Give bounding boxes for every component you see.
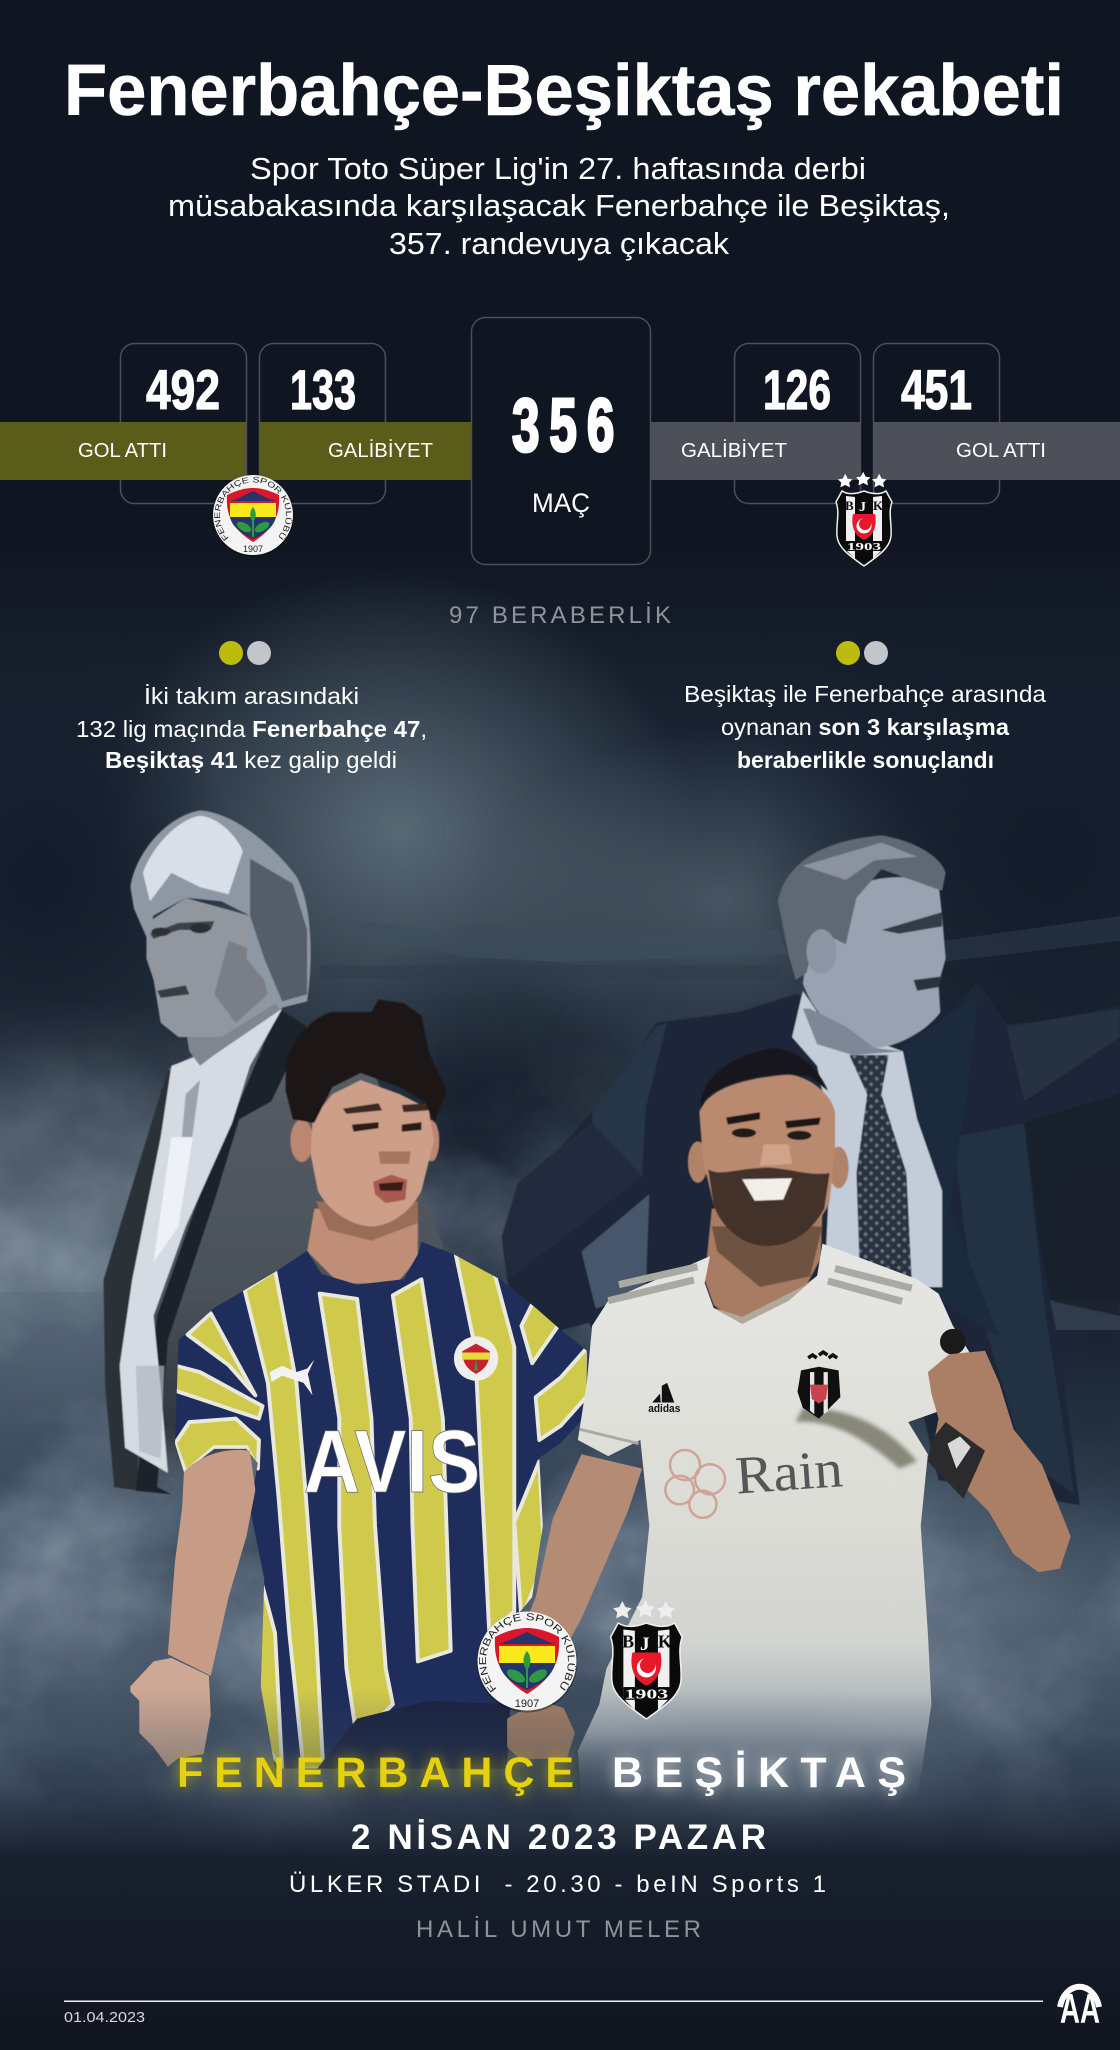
crest: Beşiktaş large: B: [622, 1631, 634, 1651]
sleeve badge: [940, 1329, 966, 1355]
match date: 2 NİSAN 2023 PAZAR: [351, 1818, 766, 1857]
crest: Beşiktaş large: K: [658, 1631, 672, 1651]
central card: matches: [472, 318, 650, 564]
title: Fenerbahçe-Beşiktaş rekabeti: [64, 51, 1064, 131]
band: Fenerbahçe wins: GALİBİYET: [328, 439, 433, 462]
date: 01.04.2023: [64, 2009, 145, 2026]
crest: Beşiktaş large: [611, 1600, 682, 1719]
team name: Beşiktaş: BEŞİKTAŞ: [612, 1749, 906, 1797]
jersey: [507, 1244, 1071, 1800]
note: right: oynanan son 3 karşılaşma: [721, 714, 1009, 740]
crest: Beşiktaş large: 1903: [625, 1687, 668, 1703]
head: [688, 1048, 849, 1330]
band: Beşiktaş goals: GOL ATTI: [956, 439, 1046, 462]
note: left: İki takım arasındaki: [144, 683, 359, 709]
AA logo: AA: [1060, 1985, 1100, 2032]
stat card: Fenerbahçe wins: 133: [290, 358, 356, 421]
band: Fenerbahçe goals: [0, 422, 246, 480]
stadium roof: [0, 916, 1120, 1330]
background: stadium and smoke: [0, 492, 1120, 1836]
flower logo: [665, 1450, 725, 1518]
band: Beşiktaş goals: [874, 422, 1120, 480]
note: right: beraberlikle sonuçlandı: [737, 747, 994, 773]
jersey: [130, 1240, 593, 1776]
crest: Beşiktaş small: K: [873, 498, 884, 513]
coach: Şenol Güneş: [502, 835, 1120, 1505]
band: Fenerbahçe goals: GOL ATTI: [78, 439, 167, 462]
note: left: Beşiktaş 41 kez galip geldi: [105, 747, 397, 773]
crest: Beşiktaş small: B: [845, 498, 854, 513]
draws label: 97 BERABERLİK: [449, 602, 671, 629]
stat card: Beşiktaş wins: [734, 344, 860, 504]
crest: Fenerbahçe large: 1907: [515, 1698, 539, 1710]
head: [286, 1000, 446, 1284]
shoulder stripes: [580, 1267, 912, 1444]
central card: matches: 356: [512, 384, 624, 468]
icon: dots left: [219, 641, 271, 665]
subtitle: 357. randevuya çıkacak: [389, 226, 730, 261]
note: left: 132 lig maçında Fenerbahçe 47 ,: [76, 716, 427, 742]
note: left: [76, 641, 427, 773]
subtitle: [168, 151, 950, 261]
player: Arda Güler: [130, 1000, 593, 1776]
adidas logo: adidas: [648, 1403, 680, 1415]
band: Fenerbahçe wins: [260, 422, 472, 480]
crest: Fenerbahçe large: FENERBAHÇE SPOR KULÜBÜ: [479, 1613, 576, 1692]
icon: dots right: [836, 641, 888, 665]
stat card: Beşiktaş goals: 451: [901, 358, 972, 421]
crest: Fenerbahçe small: 1907: [243, 544, 263, 554]
arm and fist: [928, 1351, 1071, 1572]
author: HALİL UMUT MELER: [416, 1916, 701, 1943]
footer: [64, 1985, 1100, 2032]
puma logo: [270, 1360, 314, 1395]
shirt: [120, 1009, 282, 1473]
adidas logo: [648, 1383, 680, 1415]
crest: Beşiktaş large: J: [640, 1634, 650, 1655]
subtitle: müsabakasında karşılaşacak Fenerbahçe ile Beşiktaş,: [168, 188, 950, 223]
chest badge: [454, 1336, 498, 1381]
note: right: Beşiktaş ile Fenerbahçe arasında: [684, 681, 1046, 707]
sponsor: AVIS: AVIS: [304, 1411, 480, 1511]
stat card: Beşiktaş goals: [874, 344, 1000, 504]
AA logo: [1060, 1985, 1100, 2032]
shirt and tie: [792, 991, 942, 1287]
band: Beşiktaş wins: [650, 422, 860, 480]
crest: Fenerbahçe small: FENERBAHÇE SPOR KULÜBÜ: [214, 476, 292, 541]
stat card: Fenerbahçe goals: 492: [146, 358, 220, 421]
crest: Beşiktaş small: [836, 472, 892, 566]
sponsor: Rain: Rain: [733, 1438, 845, 1506]
stat card: Fenerbahçe goals: [120, 344, 246, 504]
stats panel: [0, 316, 1120, 567]
crest: Beşiktaş small: 1903: [847, 541, 882, 553]
arm and hand: [130, 1450, 255, 1767]
neck and face: [186, 1001, 282, 1066]
stat card: Fenerbahçe wins: [260, 344, 386, 504]
subtitle: Spor Toto Süper Lig'in 27. haftasında derbi: [250, 151, 866, 186]
team name: Fenerbahçe: FENERBAHÇE: [177, 1749, 574, 1797]
coach: Jorge Jesus: [104, 810, 443, 1494]
chest crest: [797, 1352, 840, 1419]
note: right: [684, 641, 1046, 773]
crest: Beşiktaş small: J: [859, 500, 866, 515]
bottom haze: [0, 1690, 1120, 2050]
player: Rachid Ghezzal: [507, 1048, 1071, 1800]
central card: matches: MAÇ: [532, 488, 590, 518]
stat card: Beşiktaş wins: 126: [763, 358, 831, 421]
band: Beşiktaş wins: GALİBİYET: [681, 439, 787, 462]
venue and broadcaster: ÜLKER STADI - 20.30 - beIN Sports 1: [289, 1871, 826, 1898]
